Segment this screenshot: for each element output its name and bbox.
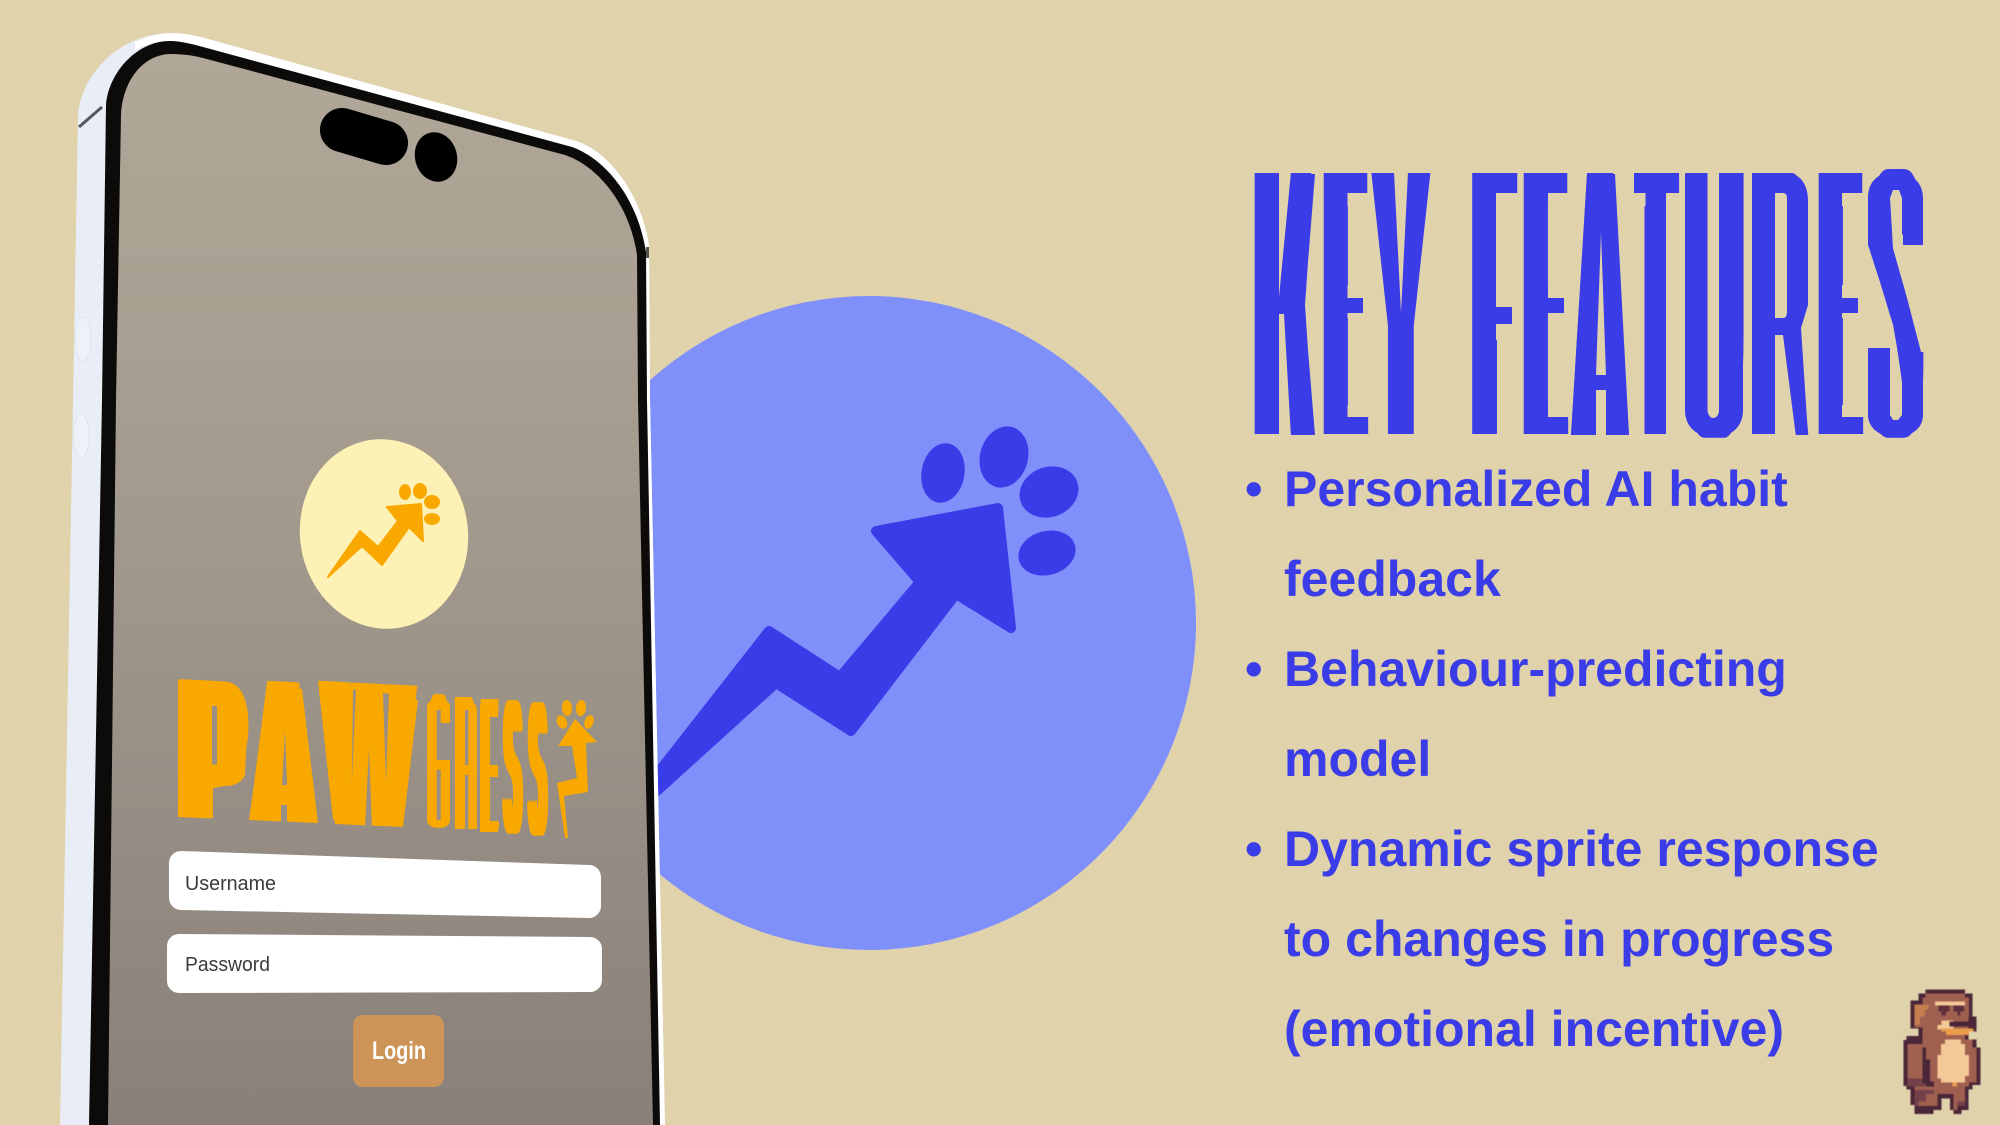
app icon: orange arrow and paw — [328, 483, 440, 577]
app icon: yellow disc — [288, 428, 480, 640]
antenna line — [79, 107, 102, 127]
sprite nose — [1949, 1019, 1977, 1027]
sprite arm line — [1922, 1047, 1934, 1087]
bullet: personalized feedback — [1245, 461, 1788, 607]
wordmark: PAWGRESS: E — [482, 659, 495, 870]
sprite belly — [1937, 1039, 1969, 1083]
sprite snout — [1938, 1021, 1953, 1029]
login button: Login — [372, 1037, 426, 1065]
bullet: predicting model: Behaviour-predicting — [1284, 641, 1787, 697]
logo mark: paw arrow — [555, 700, 597, 838]
icon: rising arrow with paw — [625, 421, 1086, 820]
username field — [181, 863, 589, 906]
sprite eyes — [1938, 1006, 1964, 1016]
wordmark: PAWGRESS — [178, 637, 548, 875]
phone bezel — [89, 41, 660, 1125]
sprite muzzle — [1942, 1028, 1973, 1035]
password field: Password — [185, 954, 270, 976]
dynamic island pill — [342, 130, 386, 143]
bullet: personalized feedback: Personalized AI habit — [1284, 461, 1788, 517]
bullet: dynamic sprite — [1245, 821, 1879, 1057]
camera — [409, 127, 463, 187]
wordmark: PAWGRESS: P — [182, 637, 241, 863]
phone screen — [108, 54, 653, 1125]
wordmark: PAWGRESS: S — [505, 662, 520, 873]
title: Y — [1380, 92, 1421, 515]
password field — [179, 946, 590, 981]
bullet: predicting model — [1245, 641, 1787, 787]
phone top highlight — [135, 33, 665, 1125]
sprite outline — [1903, 989, 1981, 1114]
wordmark: PAWGRESS: R — [457, 657, 474, 868]
wordmark: PAWGRESS: S — [530, 664, 545, 875]
bullet: dynamic sprite: to changes in progress — [1284, 911, 1834, 967]
side button upper — [75, 317, 91, 361]
username field: Username — [185, 873, 276, 895]
title: F — [1478, 92, 1509, 515]
login button — [353, 1015, 444, 1087]
side button lower — [73, 414, 89, 458]
sprite ear — [1914, 1005, 1928, 1025]
sprite body — [1907, 993, 1977, 1110]
sprite belly mark — [1953, 1083, 1957, 1087]
title: U — [1690, 92, 1738, 515]
frame marks — [646, 247, 649, 258]
title: T — [1643, 92, 1670, 515]
wordmark: PAWGRESS: A — [258, 638, 308, 864]
circle: periwinkle backdrop — [542, 296, 1196, 950]
title: S — [1873, 92, 1918, 515]
title: K — [1259, 92, 1305, 515]
title: A — [1581, 92, 1619, 515]
title: E — [1330, 92, 1360, 515]
bullet: predicting model: • — [1245, 641, 1263, 697]
phone body: outer frame — [60, 33, 665, 1125]
icon: pixel dog sprite — [1902, 988, 1982, 1115]
bullet: predicting model: model — [1284, 731, 1431, 787]
wordmark: PAWGRESS: G — [430, 656, 447, 867]
sprite arm and leg shading — [1907, 1078, 1965, 1106]
title: E — [1530, 92, 1560, 515]
bullet: personalized feedback: • — [1245, 461, 1263, 517]
bullet: dynamic sprite: (emotional incentive) — [1284, 1001, 1784, 1057]
title: R — [1757, 92, 1801, 515]
bullet: personalized feedback: feedback — [1284, 551, 1501, 607]
wordmark: PAWGRESS: W — [328, 639, 407, 866]
title — [1254, 92, 1924, 515]
bullet: dynamic sprite: • — [1245, 821, 1263, 877]
sprite brow — [1935, 1002, 1965, 1006]
bullet: dynamic sprite: Dynamic sprite response — [1284, 821, 1879, 877]
title: E — [1825, 92, 1855, 515]
